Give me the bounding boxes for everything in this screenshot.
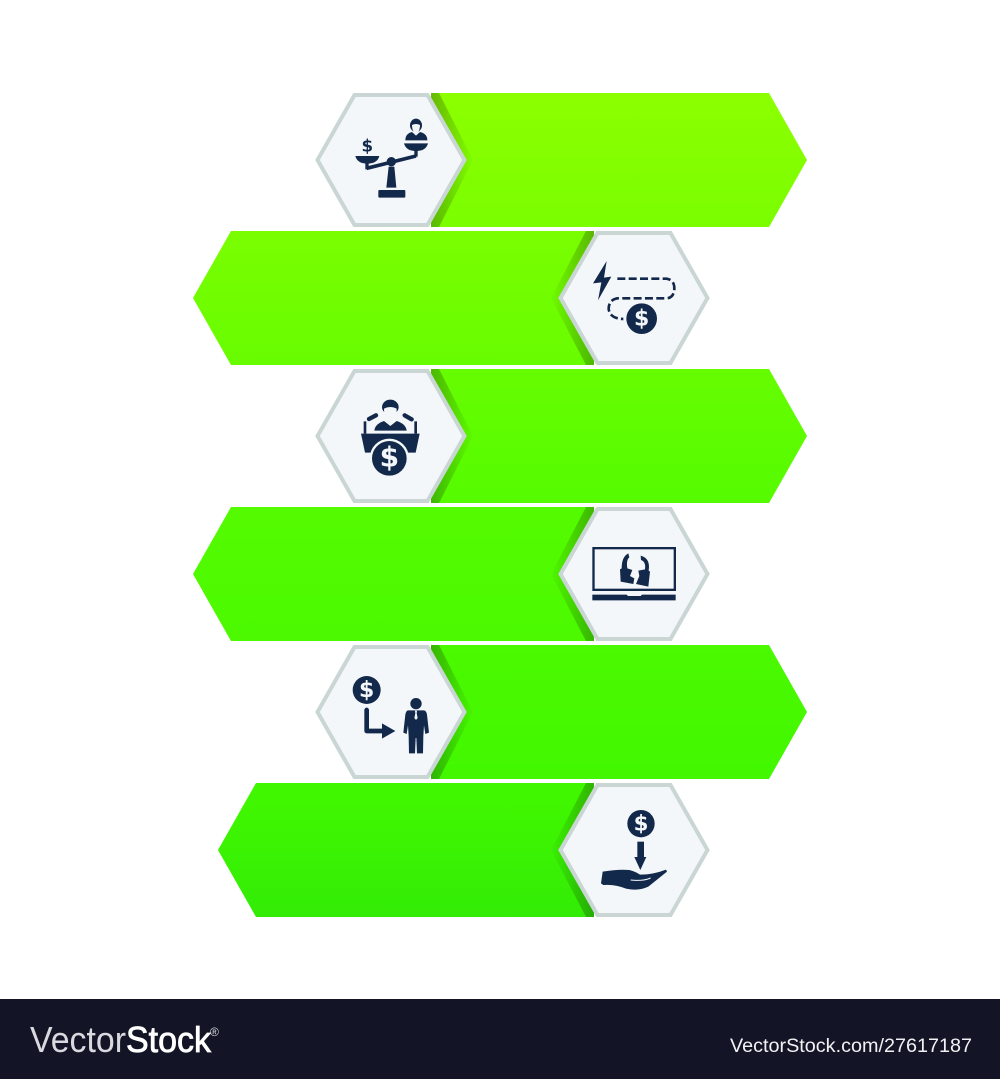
icon: speaker at podium with dollar (361, 400, 420, 478)
icon: lightning bolt path to dollar: $ (634, 306, 649, 331)
banner 4 shadow (551, 507, 594, 641)
icon: dollar dropping into hand (601, 810, 667, 890)
icon: scales weighing money against person: $ (362, 137, 373, 156)
hexagon 5 (318, 647, 464, 777)
row 3: right-pointing banner with speaker icon (318, 369, 807, 503)
row 1: right-pointing banner with scales icon (318, 93, 807, 227)
row 4: left-pointing banner with laptop icon (193, 507, 708, 641)
footer logo: Stock (126, 1019, 212, 1060)
row 5: right-pointing banner with payee icon (318, 645, 807, 779)
row 2: left-pointing banner with energy cost icon (193, 231, 708, 365)
icon: speaker at podium with dollar: $ (380, 441, 399, 474)
banner 3 (431, 369, 807, 503)
icon: dollar arrow to businessman (353, 676, 429, 753)
hexagon 3 (318, 371, 464, 501)
icon: dollar arrow to businessman: $ (359, 678, 374, 703)
row 6: left-pointing banner with receiving hand icon (218, 783, 708, 917)
hexagon 1 (318, 95, 464, 225)
banner 5 (431, 645, 807, 779)
banner 6 (218, 783, 594, 917)
banner 4 (193, 507, 594, 641)
icon: scales weighing money against person (355, 119, 428, 198)
icon: lightning bolt path to dollar (593, 261, 674, 334)
icon: laptop with broken lock (592, 548, 676, 600)
footer logo (30, 1019, 219, 1060)
hexagon 2 (560, 233, 708, 363)
banner 5 shadow (431, 645, 473, 779)
banner 3 shadow (431, 369, 473, 503)
icon: dollar dropping into hand: $ (634, 811, 648, 836)
hexagon 4 (560, 509, 708, 639)
hexagon 6 (560, 785, 708, 915)
footer bar (0, 999, 1000, 1079)
banner 1 (431, 93, 807, 227)
footer logo: ® (210, 1025, 219, 1039)
footer image id: VectorStock.com/27617187 (730, 1035, 972, 1057)
banner 6 shadow (551, 783, 594, 917)
banner 1 shadow (431, 93, 473, 227)
banner 2 shadow (551, 231, 594, 365)
banner 2 (193, 231, 594, 365)
footer logo: Vector (30, 1019, 126, 1060)
